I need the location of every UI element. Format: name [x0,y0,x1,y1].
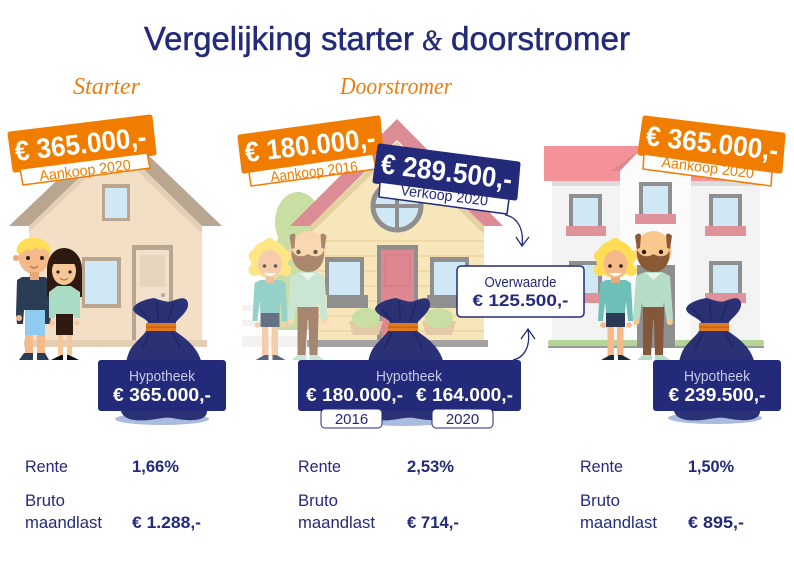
price tag: doorstromer verkoop 2020: € 289.500,- [379,148,514,195]
table: starter rates: 1,66% [132,457,179,476]
table: nieuw huis rates [580,457,744,532]
price tag: doorstromer nieuw huis aankoop 2020: € 365.000,- [644,120,780,166]
mortgage bag: nieuw huis: Hypotheek [684,368,750,385]
price tag: doorstromer verkoop 2020: Verkoop 2020 [400,182,489,210]
title: & [422,24,443,57]
title: doorstromer [451,20,630,57]
mortgage bag: doorstromer: 2016 [335,411,368,428]
price tag: doorstromer aankoop 2016: € 180.000,- [243,122,377,168]
mortgage bag: doorstromer [298,298,521,428]
table: nieuw huis rates: maandlast [580,513,657,532]
mortgage bag: starter: Hypotheek [129,368,195,385]
mortgage bag: nieuw huis [653,298,781,424]
people: doorstromer couple at new house [594,231,673,360]
mortgage bag: doorstromer: € 164.000,- [416,385,513,405]
price tag: doorstromer aankoop 2016 [240,118,381,186]
price tag: starter aankoop 2020: € 365.000,- [13,121,148,167]
arrow: verkoop to overwaarde [505,215,529,246]
heading: Doorstromer: Doorstromer [339,74,453,100]
callout: overwaarde [457,266,584,317]
price tag: doorstromer nieuw huis aankoop 2020: Aankoop 2020 [661,154,755,182]
illustration: starter house [9,124,222,347]
price tag: doorstromer nieuw huis aankoop 2020 [640,118,783,186]
table: starter rates: Rente [25,457,68,476]
mortgage bag: nieuw huis: € 239.500,- [668,385,766,405]
mortgage bag: doorstromer: 2020 [446,411,479,428]
table: doorstromer rates: Bruto [298,491,338,510]
price tag: starter aankoop 2020 [10,117,154,185]
table: doorstromer rates: € 714,- [407,513,459,532]
table: doorstromer rates: Rente [298,457,341,476]
illustration: doorstromer old house [242,119,503,347]
table: doorstromer rates [298,457,459,532]
heading: Starter: Starter [73,74,141,100]
price tag: starter aankoop 2020: Aankoop 2020 [38,157,132,185]
mortgage bag: starter: € 365.000,- [113,385,211,405]
table: nieuw huis rates: € 895,- [688,513,744,532]
illustration: doorstromer new house [544,146,768,348]
table: nieuw huis rates: Rente [580,457,623,476]
callout: overwaarde: € 125.500,- [472,291,568,310]
mortgage bag: doorstromer: € 180.000,- [306,385,403,405]
arrow: overwaarde to hypotheek [513,329,535,360]
mortgage bag: doorstromer: Hypotheek [376,368,442,385]
people: doorstromer couple at old house [248,231,328,360]
table: starter rates: Bruto [25,491,65,510]
people: starter couple [13,238,82,360]
price tag: doorstromer verkoop 2020 [375,146,518,214]
title [144,20,630,57]
table: starter rates [25,457,201,532]
mortgage bag: starter [98,298,226,425]
callout: overwaarde: Overwaarde [484,274,556,291]
price tag: doorstromer aankoop 2016: Aankoop 2016 [269,158,359,186]
table: doorstromer rates: 2,53% [407,457,454,476]
table: doorstromer rates: maandlast [298,513,375,532]
title: Vergelijking starter [144,20,414,57]
table: starter rates: € 1.288,- [132,513,201,532]
table: nieuw huis rates: Bruto [580,491,620,510]
table: nieuw huis rates: 1,50% [688,457,734,476]
table: starter rates: maandlast [25,513,102,532]
